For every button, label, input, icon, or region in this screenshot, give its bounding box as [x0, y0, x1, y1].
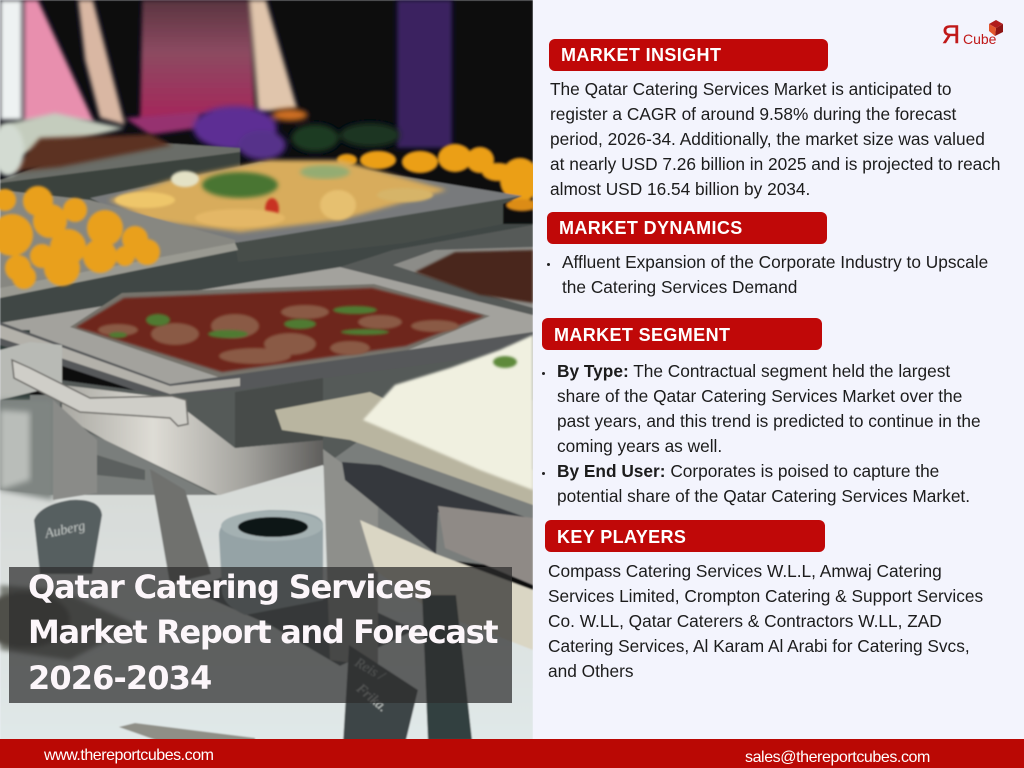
text block: key players: and Others — [548, 661, 634, 681]
dark band behind trays — [0, 224, 533, 323]
title: Qatar Catering Services — [28, 568, 431, 606]
text block: key players: Co. W.LL, Qatar Caterers & Contractors W.LL, ZAD — [548, 611, 942, 631]
heading: market segment — [542, 318, 822, 350]
heading: key players — [545, 520, 825, 552]
text block: key players: Compass Catering Services W.L.L, Amwaj Catering — [548, 561, 942, 581]
handle — [12, 360, 188, 426]
text block: by type: past years, and this trend is predicted to continue in the — [557, 411, 981, 431]
text block: by type — [542, 361, 981, 456]
title: Market Report and Forecast — [28, 613, 497, 651]
tray of fried balls — [0, 186, 238, 298]
email: sales@thereportcubes.com — [745, 749, 930, 766]
text block: key players: Services Limited, Crompton Catering & Support Services — [548, 586, 983, 606]
panel: market insight — [549, 39, 1001, 199]
stand legs — [53, 400, 415, 666]
title — [28, 568, 498, 697]
text block: by type: coming years as well. — [557, 436, 722, 456]
heading: market dynamics: MARKET DYNAMICS — [559, 218, 743, 238]
text block: market insight — [550, 79, 1001, 199]
panel: key players — [545, 520, 983, 681]
text block: market insight: The Qatar Catering Services Market is anticipated to — [550, 79, 952, 99]
right tray with grilled meat — [340, 225, 533, 315]
website: www.thereportcubes.com — [44, 747, 214, 764]
salad tray — [90, 160, 522, 262]
tray front rim and body — [0, 322, 533, 497]
stew tray — [0, 267, 533, 386]
fuel can — [219, 510, 323, 615]
logo — [942, 20, 1003, 48]
text block: by type: share of the Qatar Catering Services Market over the — [557, 386, 962, 406]
backdrop — [0, 0, 533, 740]
rice tray — [275, 335, 533, 740]
text block: by end user — [542, 461, 970, 506]
text block: market insight: period, 2026-34. Additionally, the market size was valued — [550, 129, 985, 149]
text block: dynamics bullet — [547, 252, 988, 297]
orange slices — [337, 144, 540, 211]
text block: dynamics bullet: the Catering Services Demand — [562, 277, 797, 297]
spoons — [0, 585, 255, 745]
table labels: Reis / — [351, 655, 388, 685]
heading: market insight: MARKET INSIGHT — [561, 45, 721, 65]
heading: market segment: MARKET SEGMENT — [554, 325, 730, 345]
blurred guests — [0, 0, 452, 148]
shadow fill under trays — [0, 395, 533, 570]
text block: key players — [548, 561, 983, 681]
text block: dynamics bullet: Affluent Expansion of the Corporate Industry to Upscale — [562, 252, 988, 272]
text block: by end user: By End User: Corporates is poised to capture the — [557, 461, 939, 481]
text block: key players: Catering Services, Al Karam Al Arabi for Catering Svcs, — [548, 636, 970, 656]
table cloth — [0, 465, 533, 740]
text block: by end user: potential share of the Qatar Catering Services Market. — [557, 486, 970, 506]
text block: market insight: register a CAGR of around 9.58% during the forecast — [550, 104, 956, 124]
logo mark: Cube — [963, 31, 997, 47]
title panel — [9, 567, 512, 703]
panel: market dynamics — [547, 212, 988, 297]
logo mark — [942, 20, 1003, 48]
heading: market insight — [549, 39, 828, 71]
table labels — [34, 500, 418, 744]
table labels: Auberg — [43, 519, 87, 542]
footer bar — [0, 739, 1024, 768]
table labels: Frika. — [353, 681, 390, 715]
heading: market dynamics — [547, 212, 827, 244]
flowers and greenery — [193, 106, 400, 160]
text block: by type: By Type: The Contractual segment held the largest — [557, 361, 950, 381]
panel: market segment — [542, 318, 981, 506]
text block: market insight: almost USD 16.54 billion by 2034. — [550, 179, 810, 199]
back-left tray — [0, 113, 240, 205]
photo: catering buffet trays — [0, 0, 533, 739]
heading: key players: KEY PLAYERS — [557, 527, 686, 547]
text block: market insight: at nearly USD 7.26 billion in 2025 and is projected to reach — [550, 154, 1001, 174]
title: 2026-2034 — [28, 659, 211, 697]
